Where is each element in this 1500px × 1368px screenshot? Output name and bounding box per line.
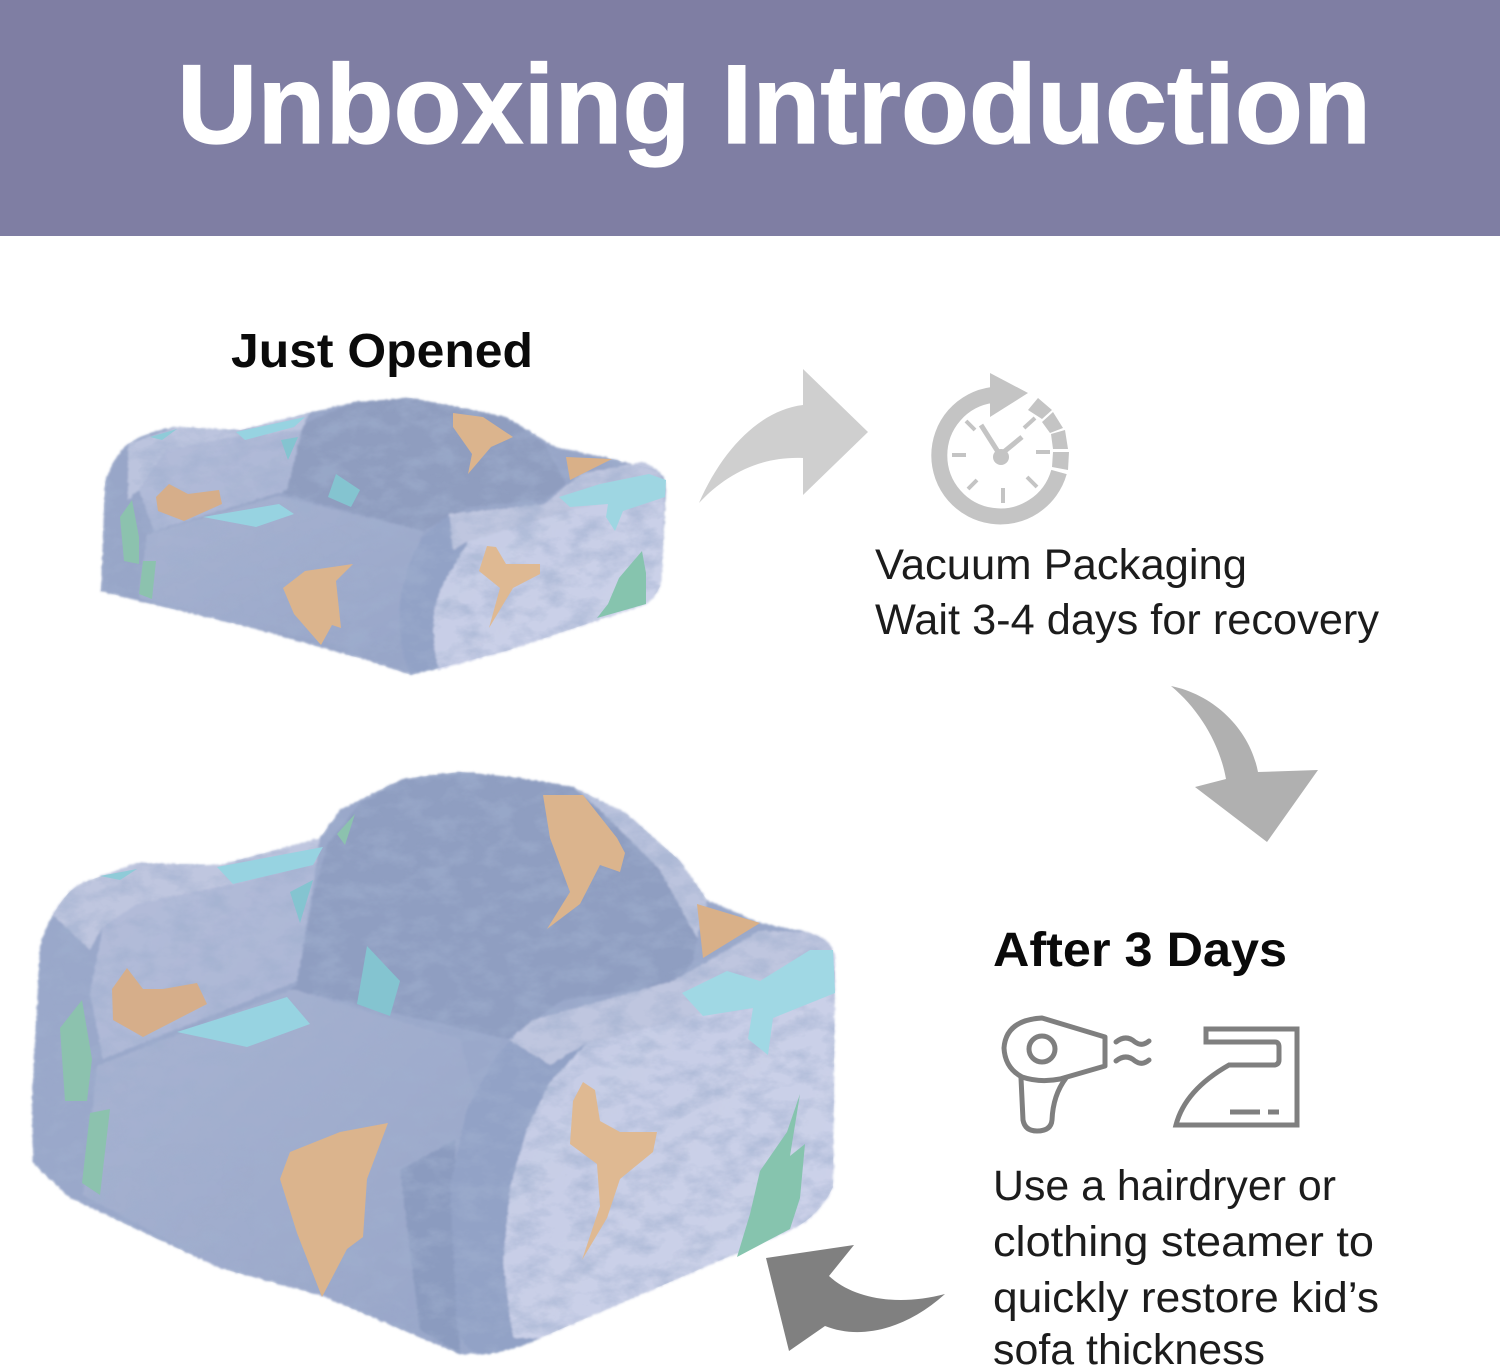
icon: clock with arrow: [939, 373, 1069, 516]
arrow: back to large sofa: [766, 1245, 945, 1351]
heading: just opened: Just Opened: [231, 325, 533, 378]
small sofa: just opened: [95, 395, 670, 680]
text: vacuum packaging: [875, 541, 1380, 644]
text: vacuum packaging: Vacuum Packaging: [875, 541, 1247, 589]
small sofa fur texture: [95, 395, 670, 680]
large sofa dinosaurs: [60, 795, 835, 1297]
text: hairdryer instructions: clothing steamer to: [993, 1218, 1374, 1266]
title: Unboxing Introduction: [177, 42, 1371, 167]
text: hairdryer instructions: quickly restore kid’s: [993, 1274, 1379, 1322]
small sofa body: [101, 398, 666, 675]
heading: after 3 days: After 3 Days: [993, 924, 1287, 977]
arrow: to clock: [699, 369, 868, 503]
large sofa: after 3 days: [28, 765, 840, 1360]
text: vacuum packaging: Wait 3-4 days for recovery: [875, 596, 1380, 644]
icon: clothing steamer: [1176, 1029, 1297, 1125]
text: hairdryer instructions: Use a hairdryer or: [993, 1162, 1336, 1210]
small sofa dinosaurs: [120, 413, 666, 645]
large sofa fur texture: [28, 765, 840, 1360]
text: hairdryer instructions: [993, 1162, 1379, 1368]
large sofa body: [32, 772, 835, 1354]
arrow: down to after 3 days: [1171, 686, 1318, 842]
title banner: [0, 0, 1500, 236]
icon: hair dryer: [1004, 1018, 1149, 1131]
